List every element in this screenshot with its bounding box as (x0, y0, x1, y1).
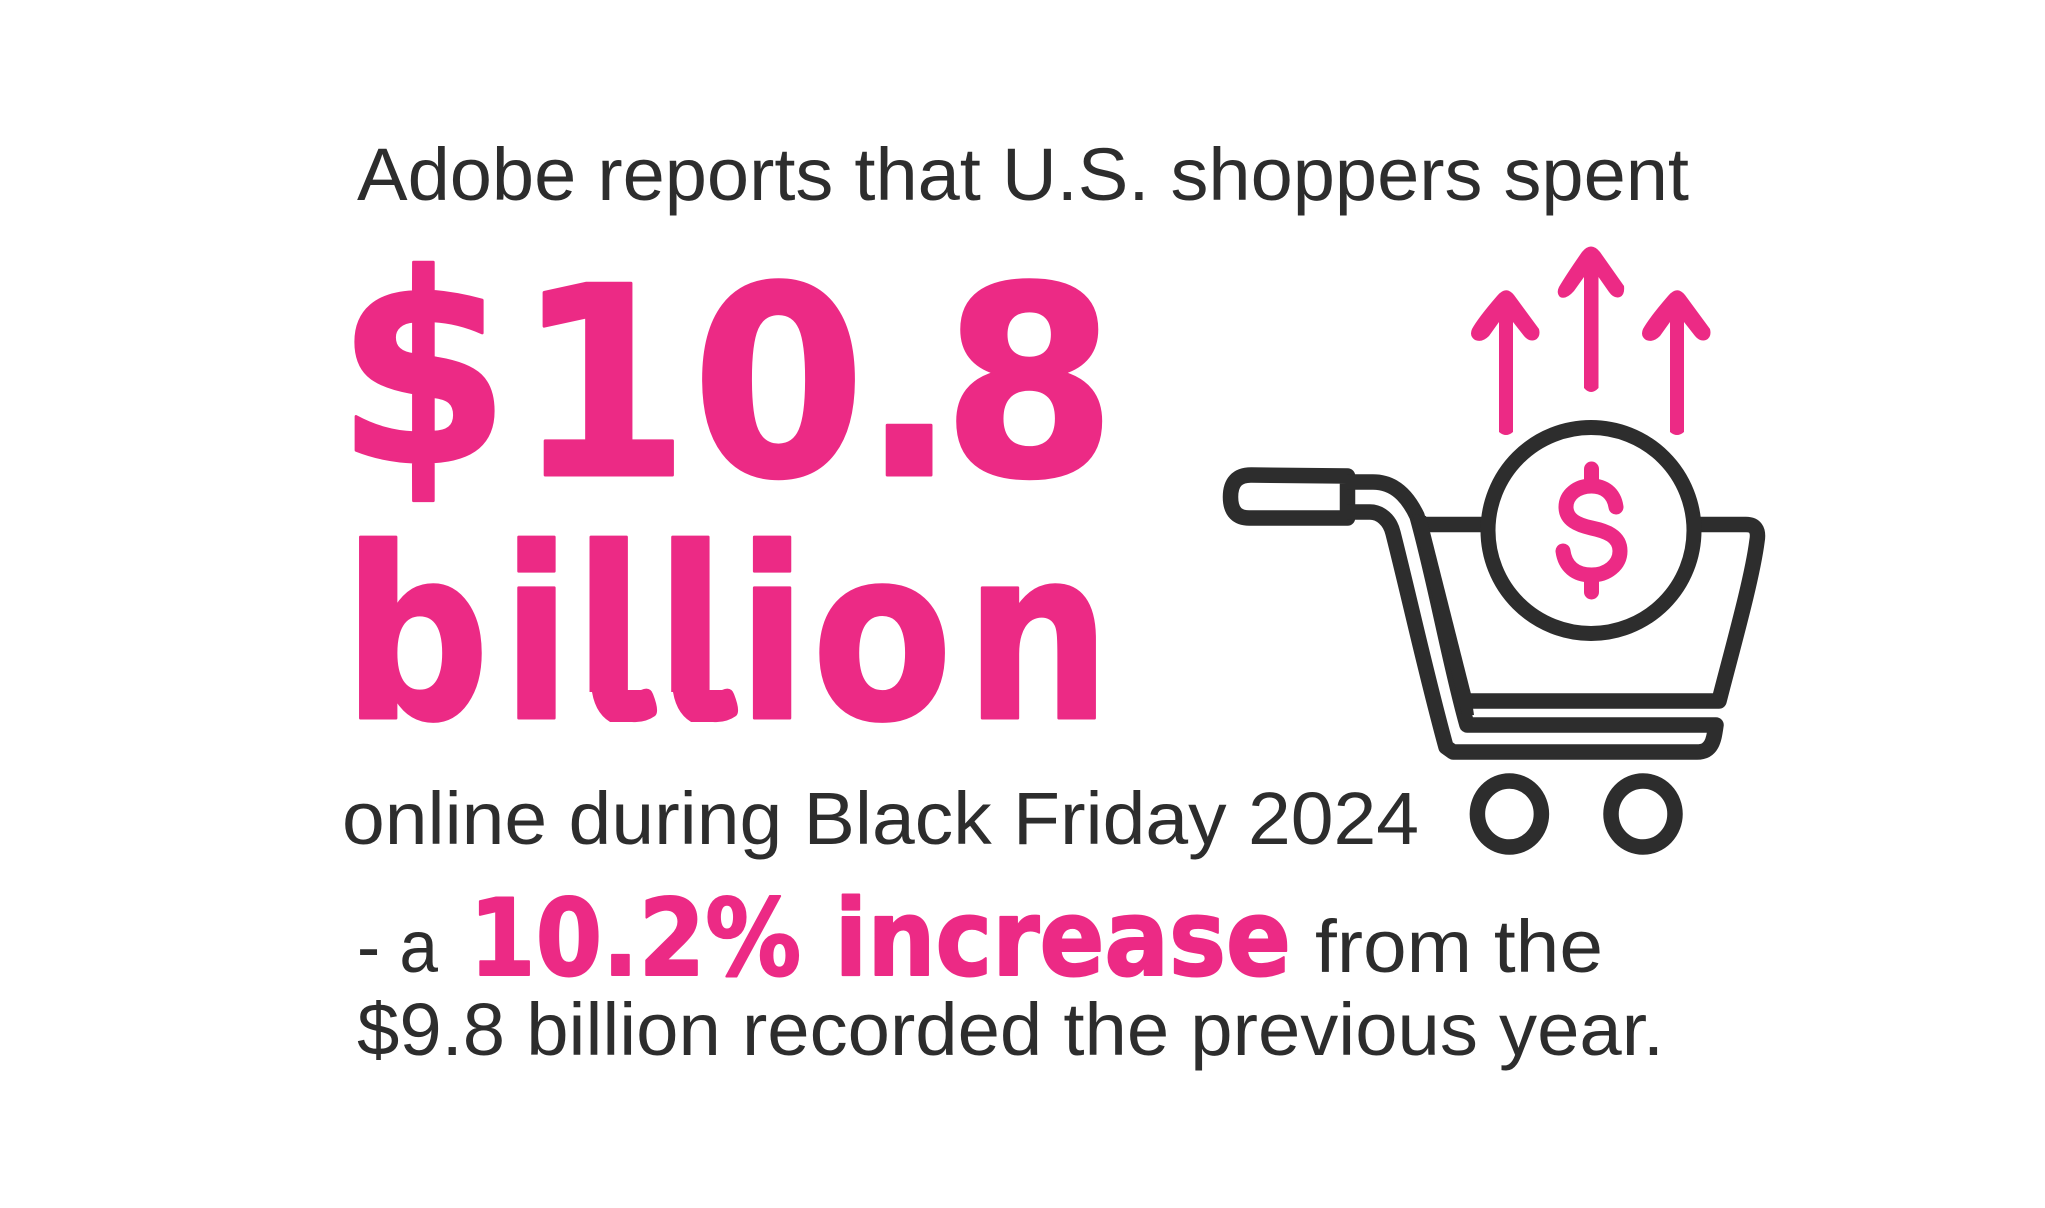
coin (1488, 428, 1694, 634)
highlight: 10.2% increase: 10.2% increase (469, 877, 1291, 1000)
big figure: $10.8: $10.8 (336, 219, 1116, 538)
basket left wall (1412, 514, 1474, 715)
icon: dollar sign (1563, 469, 1620, 592)
wheel: left (1477, 781, 1541, 847)
closing text line: $9.8 billion recorded the previous year. (357, 988, 1664, 1071)
context text line: online during Black Friday 2024 (342, 777, 1419, 860)
text: from the: from the (1315, 905, 1603, 988)
arrow: right (1642, 290, 1710, 435)
big figure: billion: billion (343, 498, 1111, 775)
tails of the letters l (600, 689, 738, 722)
cart upper rail (1347, 482, 1716, 752)
wheel: right (1611, 781, 1675, 847)
arrow: left (1471, 290, 1540, 435)
basket top bar left (1424, 517, 1486, 532)
rounded lower-left corners of the letters l (589, 692, 695, 724)
arrow: middle (1558, 246, 1624, 392)
cart handle grip (1230, 475, 1348, 518)
text: dash a: - a (357, 905, 439, 988)
arrows: rising (1471, 246, 1710, 435)
basket right side and bottom (1468, 524, 1758, 701)
cart body (1230, 475, 1758, 752)
icon: shopping cart with coin and rising arrows (1230, 246, 1758, 847)
intro text line: Adobe reports that U.S. shoppers spent (357, 133, 1689, 216)
